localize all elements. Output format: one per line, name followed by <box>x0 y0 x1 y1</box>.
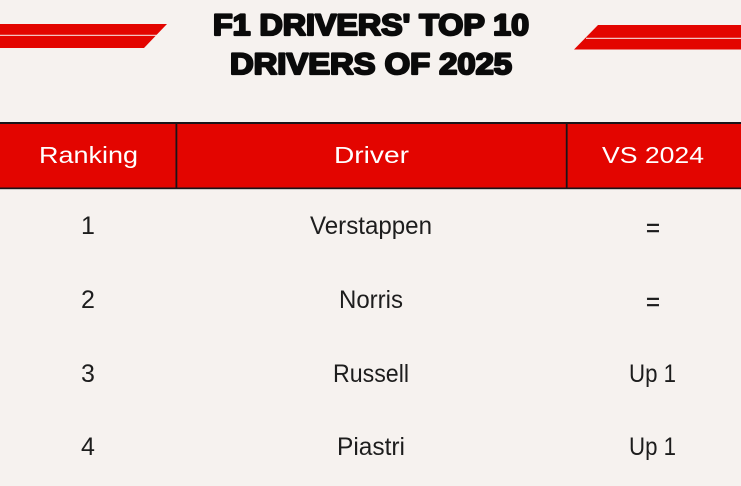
table row 4: Up 1 <box>629 433 676 461</box>
table row 3 <box>81 360 676 388</box>
table row 1: 1 <box>81 212 95 240</box>
table row 2 <box>81 286 660 316</box>
table header <box>0 122 741 189</box>
table row 2: 2 <box>81 286 95 314</box>
table row 1 <box>81 212 660 242</box>
table row 4 <box>81 433 676 461</box>
header: VS 2024: VS 2024 <box>602 142 704 168</box>
title: DRIVERS OF 2025 <box>230 48 512 81</box>
table row 3: Russell <box>333 360 409 388</box>
table row 2: = <box>646 288 660 316</box>
header: Ranking: Ranking <box>39 142 138 168</box>
table row 1: = <box>646 214 660 242</box>
table row 3: 3 <box>81 360 95 388</box>
table row 3: Up 1 <box>629 360 676 388</box>
table row 4: 4 <box>81 433 95 461</box>
table row 4: Piastri <box>337 433 405 461</box>
table row 2: Norris <box>339 286 403 314</box>
title: F1 DRIVERS' TOP 10 <box>213 9 529 42</box>
title <box>213 9 529 81</box>
left racing stripes <box>0 24 167 48</box>
header: Driver: Driver <box>334 142 409 168</box>
right racing stripes <box>574 25 741 50</box>
table row 1: Verstappen <box>310 212 432 240</box>
